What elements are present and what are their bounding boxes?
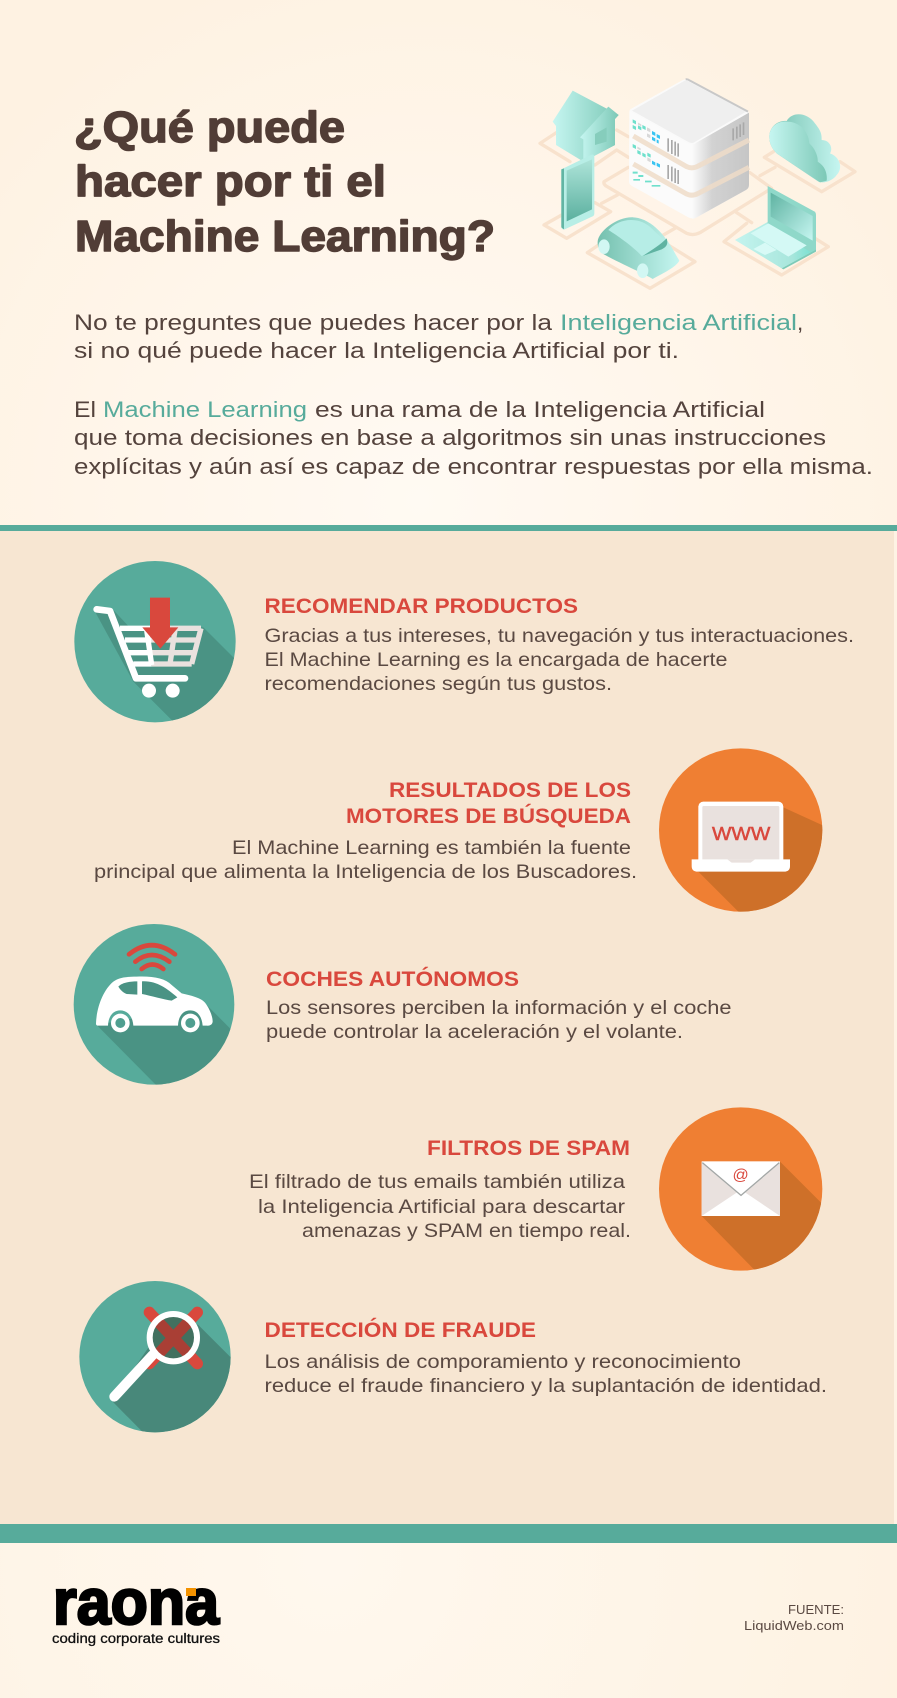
item 1: recomendar productos [74, 561, 852, 722]
body text: principal que alimenta la Inteligencia de los Buscadores. [94, 861, 637, 883]
icon: connected car [74, 924, 234, 1085]
intro paragraphs: que toma decisiones en base a algoritmos sin unas instrucciones [74, 425, 826, 450]
body text: recomendaciones según tus gustos. [264, 673, 612, 695]
intro paragraphs [74, 310, 873, 479]
heading: RESULTADOS DE LOS [389, 778, 631, 802]
body text: El Machine Learning es también la fuente [232, 837, 631, 859]
body text: Los análisis de comporamiento y reconocimiento [264, 1351, 741, 1373]
item 5: detección de fraude [79, 1281, 825, 1432]
laptop [735, 186, 816, 269]
status lights [633, 119, 660, 187]
icon: laptop www [659, 748, 822, 912]
body text: puede controlar la aceleración y el volante. [266, 1021, 683, 1043]
body text: Gracias a tus intereses, tu navegación y tus interactuaciones. [264, 625, 854, 647]
body text [249, 1171, 631, 1242]
source credit: FUENTE: [788, 1602, 844, 1617]
heading: RECOMENDAR PRODUCTOS [264, 594, 578, 618]
item 2: resultados de los motores de búsqueda [95, 748, 822, 912]
body text: El Machine Learning es la encargada de hacerte [264, 649, 728, 671]
title: ¿Qué puede [74, 103, 345, 152]
intro paragraphs: El [74, 397, 96, 422]
body text [94, 837, 637, 883]
icon: envelope: @ [733, 1167, 749, 1184]
logo: raona: raona [53, 1566, 219, 1638]
body text: Los sensores perciben la información y el coche [266, 997, 732, 1019]
tablet [561, 155, 594, 229]
content panel background [0, 531, 894, 1525]
icon: envelope [659, 1107, 822, 1271]
intro paragraphs: Machine Learning [103, 397, 307, 422]
icon: laptop www: WWW [712, 823, 771, 844]
source credit: LiquidWeb.com [744, 1618, 844, 1633]
server rack [629, 79, 749, 219]
body text: reduce el fraude financiero y la suplantación de identidad. [264, 1375, 827, 1397]
intro paragraphs: Inteligencia Artificial [560, 310, 797, 335]
intro paragraphs: explícitas y aún así es capaz de encontrar respuestas por ella misma. [74, 454, 873, 479]
intro paragraphs: No te preguntes que puedes hacer por la [74, 310, 553, 335]
body text [264, 1351, 827, 1397]
logo: raona: coding corporate cultures [52, 1631, 220, 1646]
intro paragraphs: si no qué puede hacer la Inteligencia Artificial por ti. [74, 338, 679, 363]
vents [667, 122, 744, 184]
body text: El filtrado de tus emails también utiliza [249, 1171, 625, 1193]
item 3: coches autónomos [74, 924, 730, 1085]
heading: COCHES AUTÓNOMOS [266, 966, 519, 991]
body text: la Inteligencia Artificial para descartar [258, 1196, 626, 1218]
house [553, 91, 619, 162]
cloud [769, 114, 840, 182]
intro paragraphs: , [797, 310, 803, 335]
item 4: filtros de spam [250, 1107, 822, 1271]
bottom teal band [0, 1524, 897, 1543]
heading: FILTROS DE SPAM [427, 1136, 630, 1160]
intro paragraphs: es una rama de la Inteligencia Artificial [315, 397, 765, 422]
title: hacer por ti el [75, 157, 386, 206]
heading: MOTORES DE BÚSQUEDA [346, 803, 631, 828]
car [598, 217, 679, 279]
top teal band [0, 525, 897, 531]
source credit [744, 1602, 844, 1633]
body text [266, 997, 732, 1043]
illustration: connected devices [540, 79, 855, 288]
footer background [0, 1543, 897, 1698]
header background [0, 0, 897, 526]
icon: shopping cart [74, 561, 236, 722]
network platforms [540, 130, 855, 288]
heading: DETECCIÓN DE FRAUDE [264, 1317, 536, 1342]
icon: magnifier with cross [79, 1281, 231, 1432]
title [74, 103, 495, 261]
body text: amenazas y SPAM en tiempo real. [302, 1220, 631, 1242]
title: Machine Learning? [75, 212, 495, 261]
heading [346, 778, 631, 828]
body text [264, 625, 854, 695]
